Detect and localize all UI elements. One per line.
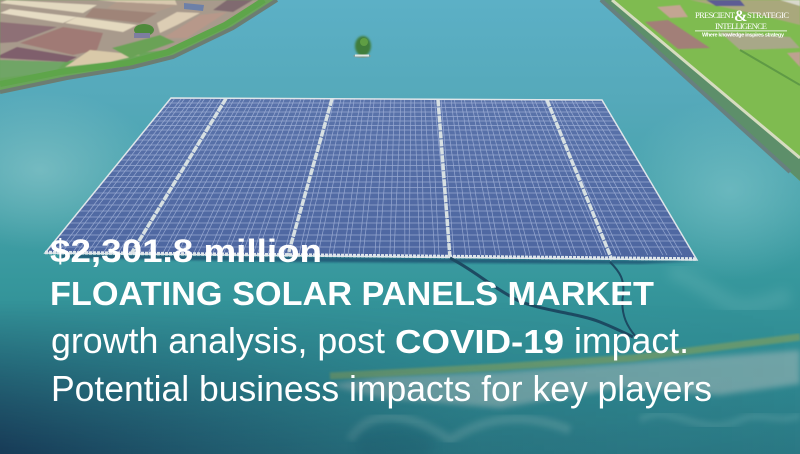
heading: market name: FLOATING SOLAR PANELS MARKET [50,276,655,313]
text: growth analysis line: COVID-19 [395,324,564,361]
logo: Prescient & Strategic Intelligence: STRATEGIC [747,10,789,20]
right shore farmland [600,0,800,181]
dark bottom vignette [0,316,478,454]
text: business impacts line: Potential business impacts for key players [51,368,712,409]
heading: market value: $2,301.8 million [50,233,322,269]
icon: tree island [353,36,371,58]
text: growth analysis line: impact. [574,320,689,361]
logo: Prescient & Strategic Intelligence [695,8,789,38]
text: growth analysis line [51,320,689,361]
walkways [131,98,612,260]
logo: Prescient & Strategic Intelligence: & [734,8,747,25]
logo: Prescient & Strategic Intelligence: PRESCIENT [695,10,736,20]
left shore farmland [0,0,277,92]
logo: Prescient & Strategic Intelligence: Where knowledge inspires strategy [702,32,785,38]
floating cables [450,258,637,338]
array shadow [60,254,697,264]
grid lines [50,99,688,255]
text: growth analysis line: growth analysis, post [51,320,385,361]
lower shore strip [330,270,800,454]
frame [45,98,697,260]
logo: Prescient & Strategic Intelligence: INTELLIGENCE [715,21,767,31]
solar panel array [44,97,698,265]
